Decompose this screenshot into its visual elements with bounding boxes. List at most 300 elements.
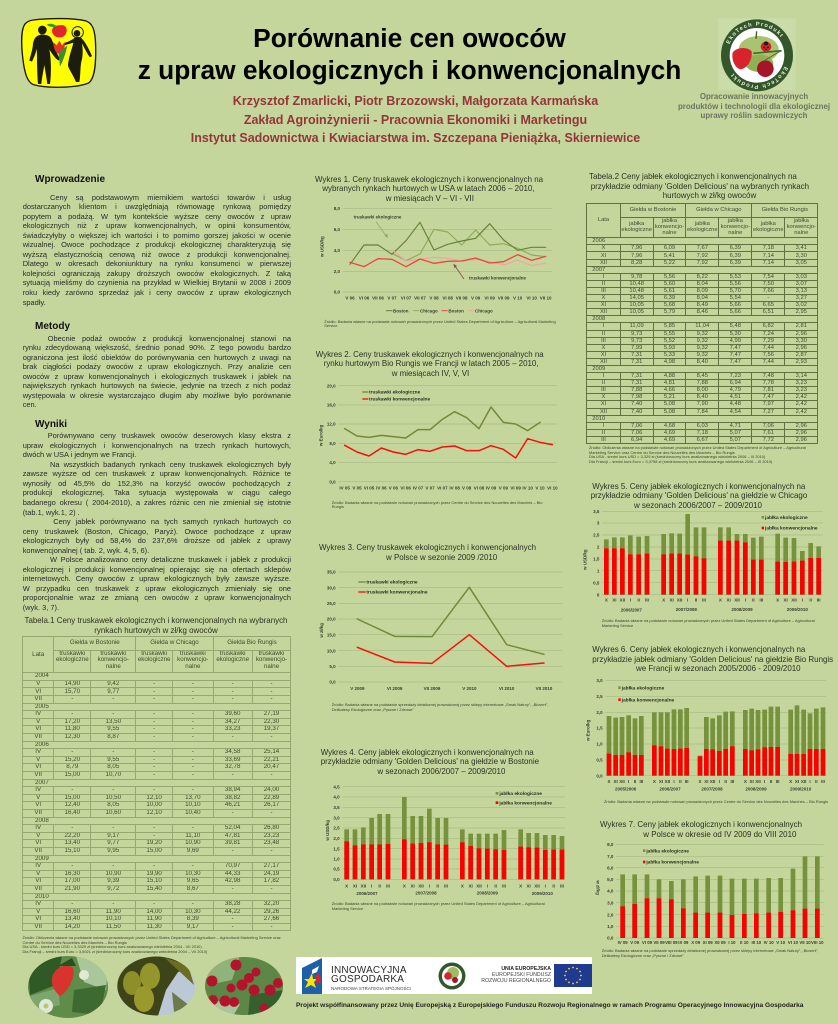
table 2: apple prices: 2,96 <box>796 430 807 436</box>
table 2: apple prices: 4,69 <box>664 437 675 443</box>
table 2: apple prices: 10,48 <box>629 281 644 287</box>
chart: Wykres 5 stacked bars: 2006/2007 <box>621 608 643 613</box>
heading: Wykres 4: przykładzie odmiany 'Golden Delicious' na giełdzie w Bostonie <box>321 757 539 766</box>
table 2: apple prices: 7,14 <box>763 260 774 266</box>
chart: Wykres 6 stacked bars: 2008/2009 <box>746 786 767 791</box>
chart: Wykres 4 stacked bars: 2,5 <box>333 825 340 830</box>
table 2: apple prices: II <box>602 331 605 337</box>
chart: Wykres 2 line chart: V 10 <box>535 485 545 490</box>
table 2: apple prices: 5,41 <box>664 253 675 259</box>
source note: Wykres 4: Źródło: Badania własne na podstawie notowań prowadzonych przez United States Department of Agriculture – Agricultural <box>332 901 545 906</box>
table 2: apple prices: 2,81 <box>796 323 807 329</box>
text block: Wprowadzenie: świadczyłyby o większej ich wartości i to pomimo gorszej jakości w ocenie <box>23 231 291 240</box>
table 2: apple prices: 6,39 <box>730 245 741 251</box>
table 2: apple prices: 7,96 <box>631 253 642 259</box>
chart: Wykres 4 stacked bars: 1,5 <box>333 846 340 851</box>
table 2: apple prices: 6,39 <box>664 295 675 301</box>
chart: Wykres 7 stacked bars: VI 09 <box>642 940 652 945</box>
chart: Wykres 1 line chart: Chicago <box>475 308 493 313</box>
chart: Wykres 6 stacked bars: XII <box>665 779 670 784</box>
authors and institute: Zakład Agroinżynierii - Pracownia Ekonomiki i Marketingu <box>244 112 587 126</box>
chart: Wykres 7 stacked bars: I 10 <box>728 940 736 945</box>
table 2: apple prices: 2,42 <box>796 394 807 400</box>
table 2: apple prices: 7,31 <box>631 359 642 365</box>
table 1: strawberry prices: ekologiczne <box>138 656 170 663</box>
chart: Wykres 6 stacked bars: XI <box>659 779 663 784</box>
table 2: apple prices: 7,66 <box>763 288 774 294</box>
table 1: strawberry prices: Giełda w Bostonie <box>70 639 120 646</box>
heading: Wykres 5: w sezonach 2006/2007 – 2009/2010 <box>634 501 762 510</box>
chart: Wykres 2 line chart <box>318 383 558 490</box>
chart: Wykres 6 stacked bars: 2,5 <box>597 694 603 699</box>
text block: Wyniki: ceny truskawek (Boston, Chicago, Paryż). Owoce pochodzące z upraw <box>23 527 291 536</box>
chart: Wykres 5 stacked bars: jabłka ekologiczne <box>764 515 808 521</box>
chart: Wykres 2 line chart: VI 06 <box>400 485 411 490</box>
chart: Wykres 4 stacked bars: II <box>552 883 555 888</box>
table 2: apple prices: 7,48 <box>763 373 774 379</box>
table 2: apple prices: 7,27 <box>763 409 774 415</box>
chart: Wykres 3 line chart: 25,0 <box>327 601 336 606</box>
table 2: apple prices: 5,22 <box>664 260 675 266</box>
chart: Wykres 4 stacked bars: XII <box>476 883 482 888</box>
table 2: apple prices: 3,03 <box>796 274 807 280</box>
chart: Wykres 3 line chart: w zł/kg <box>319 623 324 639</box>
chart: Wykres 1 line chart: VII 09 <box>498 295 510 300</box>
table 2: apple prices: 8,40 <box>697 394 708 400</box>
chart: Wykres 7 stacked bars: V 10 <box>776 940 785 945</box>
table 1: strawberry prices: konwencjo- <box>177 656 208 663</box>
chart: Wykres 6 stacked bars: 2005/2006 <box>615 786 637 791</box>
chart: Wykres 5 stacked bars: II <box>752 598 755 603</box>
table 2: apple prices: 3,07 <box>796 281 807 287</box>
chart: Wykres 2 line chart: V 06 <box>389 485 398 490</box>
chart: Wykres 2 line chart: IV 10 <box>522 485 533 490</box>
text block: Metody: cen. <box>23 400 37 409</box>
chart: Wykres 2 line chart: 16,0 <box>327 402 336 407</box>
chart: Wykres 6 stacked bars: III <box>685 779 689 784</box>
table 2: apple prices: 3,14 <box>796 373 807 379</box>
chart: Wykres 6 stacked bars: X <box>789 779 792 784</box>
table 2: apple prices: 7,47 <box>730 345 741 351</box>
table 2: apple prices: 7,31 <box>631 373 642 379</box>
table 2: apple prices: 3,23 <box>796 387 807 393</box>
table 1: strawberry prices: Giełda w Chicago <box>150 639 199 646</box>
chart: Wykres 7 stacked bars: 7,0 <box>607 854 613 859</box>
chart: Wykres 4 stacked bars: III <box>502 883 506 888</box>
chart: Wykres 2 line chart: VI 09 <box>510 485 521 490</box>
chart: Wykres 7 stacked bars: jabłka konwencjonalne <box>645 859 699 865</box>
chart: Wykres 7 stacked bars: 3,0 <box>607 900 613 905</box>
table 2: apple prices: 7,47 <box>730 352 741 358</box>
chart: Wykres 7 stacked bars: 5,0 <box>607 877 613 882</box>
table 2: apple prices: 7,06 <box>763 423 774 429</box>
heading: Tabela 2 <box>589 172 809 200</box>
chart: Wykres 4 stacked bars: 4,5 <box>333 784 340 789</box>
table 2: apple prices: 8,49 <box>697 302 708 308</box>
text: Innowacyjna Gospodarka: GOSPODARKA <box>331 974 404 985</box>
chart: Wykres 6 stacked bars: XII <box>756 779 761 784</box>
source note: Wykres 1: Źródło: Badania własne na podstawie notowań prowadzonych przez United States Department of Agriculture – Agricultural Marketing <box>324 318 556 324</box>
logo: EkoTech Produkt: EkoTech Produkt <box>726 22 783 44</box>
text block: Wyniki: Ceny jabłek porównywano na tych samych rynkach hurtowych co <box>53 517 291 526</box>
chart: Wykres 1 line chart: VII 07 <box>414 295 426 300</box>
heading: Wykres 2: Wykres 2. Ceny truskawek ekologicznych i konwencjonalnych na <box>316 350 544 358</box>
table 2: apple prices: 4,66 <box>664 387 675 393</box>
chart: Wykres 4 stacked bars: X <box>345 883 348 888</box>
table 2: apple prices: 6,39 <box>730 253 741 259</box>
source note: Wykres 5 <box>602 618 815 628</box>
chart: Wykres 6 stacked bars: X <box>744 779 747 784</box>
table 2: apple prices: 4,68 <box>664 423 675 429</box>
chart: Wykres 4 stacked bars: 2006/2007 <box>356 891 378 896</box>
chart: Wykres 4 stacked bars: I <box>429 883 430 888</box>
table 2: apple prices: XI <box>601 352 606 358</box>
chart: Wykres 6 stacked bars: X <box>653 779 656 784</box>
text block: Wyniki: Porównywano ceny truskawek owoców deserowych klasy ekstra z <box>48 431 291 440</box>
chart: Wykres 1 line chart: V 06 <box>345 295 355 300</box>
chart: Wykres 7 stacked bars <box>595 842 824 945</box>
chart: Wykres 6 stacked bars: II <box>770 779 773 784</box>
chart: Wykres 5 stacked bars: 1,5 <box>593 557 600 562</box>
chart: Wykres 6 stacked bars: X <box>608 779 611 784</box>
table 2: apple prices: jabłka <box>695 221 710 227</box>
chart: Wykres 7 stacked bars: 0,0 <box>607 935 613 940</box>
table 2: apple prices: X <box>602 295 605 301</box>
table 2: apple prices: jabłka <box>662 218 677 224</box>
chart: Wykres 1 line chart: VI 06 <box>359 295 370 300</box>
table 2: apple prices: konwencjo- <box>655 224 684 230</box>
chart: Wykres 5 stacked bars: XII <box>620 598 625 603</box>
table 2: apple prices: 7,18 <box>697 430 708 436</box>
chart: Wykres 5 stacked bars: III <box>645 598 649 603</box>
source note: table 2: Dla Francji – średni kurs Euro = 3,3798 zł (średnioroczny kurs analizowanego wieloletnia 2006 – III 2010) <box>589 459 772 464</box>
chart: Wykres 4 stacked bars: X <box>519 883 522 888</box>
table 2: apple prices: 4,79 <box>730 387 741 393</box>
table 2: apple prices: 8,09 <box>697 288 708 294</box>
text block: Wprowadzenie: spadły. <box>23 298 46 307</box>
table 2: apple prices: 7,18 <box>763 245 774 251</box>
chart: Wykres 7 stacked bars: XI 09 <box>702 940 713 945</box>
table 1: strawberry prices: nalne <box>185 663 200 670</box>
chart: Wykres 5 stacked bars: I <box>745 598 746 603</box>
table 2: apple prices: 2,87 <box>796 352 807 358</box>
text block: Wyniki: wynosiły od 45,5% do 152,3% na korzyść owoców pochodzących z <box>23 479 291 488</box>
heading: Wykres 1 <box>315 174 544 203</box>
table 2: apple prices: 5,85 <box>664 323 675 329</box>
chart: Wykres 7 stacked bars: III 10 <box>751 940 761 945</box>
table 2: apple prices: 2007 <box>592 267 605 273</box>
chart: Wykres 3 line chart: VI 2010 <box>499 686 515 691</box>
chart: Wykres 6 stacked bars: XI <box>750 779 754 784</box>
table 2: apple prices: 2,96 <box>796 423 807 429</box>
chart: Wykres 4 stacked bars: II <box>494 883 497 888</box>
chart: Wykres 5 stacked bars: X <box>776 598 779 603</box>
photo: cherries <box>205 957 283 1015</box>
text block: Wprowadzenie: wyższą elastycznością cenową niż owoce z produkcji konwencjonalnej. <box>23 250 291 259</box>
chart: Wykres 7 stacked bars: VI 10 <box>788 940 798 945</box>
table 2: apple prices: XII <box>600 260 607 266</box>
table 2: apple prices: 11,09 <box>630 323 644 329</box>
chart: Wykres 1 line chart: Chicago <box>420 308 438 313</box>
chart: Wykres 6 stacked bars: II <box>725 779 727 784</box>
chart: Wykres 6 stacked bars: I <box>674 779 675 784</box>
chart: Wykres 4 stacked bars: 3,5 <box>333 805 340 810</box>
heading: Wykres 1: wybranych rynkach hurtowych w USA w latach 2006 – 2010, <box>322 184 535 193</box>
source note: Wykres 7 <box>602 948 818 958</box>
table 2: apple prices: XI <box>601 302 606 308</box>
table 2: apple prices: 7,90 <box>697 401 708 407</box>
table 2: apple prices: 2,95 <box>796 309 807 315</box>
chart: Wykres 2 line chart: 20,0 <box>327 383 336 388</box>
chart: Wykres 1 line chart: 4,0 <box>334 248 340 253</box>
text block: Wprowadzenie: wizualnej. Owoce pochodzące z produkcji ekologicznej charakteryzują się <box>23 240 291 249</box>
table 2: apple prices: II <box>602 430 605 436</box>
table 2: apple prices: 7,98 <box>631 394 642 400</box>
table 2: apple prices: II <box>602 281 605 287</box>
chart: Wykres 1 line chart: V 08 <box>429 295 439 300</box>
table 2: apple prices: I <box>603 423 604 429</box>
text block: Metody: rynku zdecydowaną większość, średnio ponad 90%. Z tego powodu bardzo <box>23 343 291 352</box>
text block: Metody: owoców z upraw konwencjonalnych i ekologicznych truskawek i jabłek na <box>23 372 291 381</box>
photo: pears <box>117 956 196 1016</box>
chart: Wykres 1 line chart: 0,0 <box>334 290 340 295</box>
heading: Wykres 7: Wykres 7. Ceny jabłek ekologicznych i konwencjonalnych <box>600 820 802 829</box>
table 2: apple prices <box>586 203 818 444</box>
chart: Wykres 6 stacked bars: II <box>679 779 682 784</box>
chart: Wykres 1 line chart: VI 09 <box>484 295 495 300</box>
chart: Wykres 3 line chart: V 2009 <box>350 686 365 691</box>
chart: Wykres 4 stacked bars: II <box>378 883 381 888</box>
heading: Tabela 2: Tabela.2 Ceny jabłek ekologicznych i konwencjonalnych na <box>589 172 797 181</box>
icon: Innovative Economy flag <box>302 958 322 994</box>
table 2: apple prices: 5,56 <box>664 274 675 280</box>
chart: Wykres 4 stacked bars: 0,0 <box>333 877 340 882</box>
chart: Wykres 1 line chart: 8,0 <box>334 206 340 211</box>
table 2: apple prices: 5,79 <box>664 309 675 315</box>
chart: Wykres 6 stacked bars: 2006/2007 <box>660 786 681 791</box>
table 2: apple prices: 9,73 <box>631 331 642 337</box>
table 2: apple prices: XI <box>601 253 606 259</box>
text block: Wyniki: W Polsce analizowano ceny detaliczne truskawek i jabłek z produkcji <box>50 555 291 564</box>
table 2: apple prices: 6,67 <box>697 437 708 443</box>
chart: Wykres 5 stacked bars: X <box>662 598 665 603</box>
chart: Wykres 2 line chart: 12,0 <box>327 421 336 426</box>
table 2: apple prices: XII <box>600 359 607 365</box>
chart: Wykres 6 stacked bars: I <box>628 779 630 784</box>
chart: Wykres 7 stacked bars: VIII 09 <box>665 940 678 945</box>
table 2: apple prices: nalne <box>794 230 808 236</box>
chart: Wykres 7 stacked bars: II 10 <box>740 940 749 945</box>
chart: Wykres 4 stacked bars: XII <box>361 883 366 888</box>
chart: Wykres 1 line chart: VII 06 <box>372 295 384 300</box>
chart: Wykres 2 line chart: VI 10 <box>547 485 558 490</box>
source note: Wykres 3 <box>332 702 548 712</box>
table 2: apple prices: 3,27 <box>796 295 807 301</box>
table 2: apple prices: 5,55 <box>664 331 675 337</box>
table 2: apple prices: 5,08 <box>664 401 675 407</box>
chart: Wykres 3 line chart: 10,0 <box>327 649 336 654</box>
heading: Wykres 5 <box>591 482 807 510</box>
table 2: apple prices: 7,56 <box>763 352 774 358</box>
authors and institute: Instytut Sadownictwa i Kwiaciarstwa im. Szczepana Pieniążka, Skierniewice <box>191 131 640 145</box>
table 2: apple prices: III <box>601 437 606 443</box>
chart: Wykres 1 line chart: Boston <box>393 308 409 313</box>
chart: Wykres 2 line chart: 8,0 <box>329 441 336 446</box>
table 2: apple prices: 6,94 <box>730 380 741 386</box>
table 2: apple prices: 4,51 <box>730 394 741 400</box>
table 1: strawberry prices: nalne <box>264 663 279 670</box>
source note: Wykres 2: Rungis <box>332 504 344 509</box>
chart: Wykres 5 stacked bars: XI <box>613 598 617 603</box>
text block: Wyniki: ekologicznych były od 58,4% do 237,6% droższe od jabłek z uprawy <box>23 536 291 545</box>
table 1: strawberry prices: ekologiczne <box>56 656 89 663</box>
source note: table 2: Marketing Service oraz Centre du Service des Nouvelles des Marchés – Bio Rungis <box>589 450 735 455</box>
text block: Wyniki: proporcjonalnie wraz ze zmianą cen owoców z upraw konwencjonalnych <box>23 593 291 602</box>
chart: Wykres 2 line chart: VI 05 <box>364 485 375 490</box>
text block: Wprowadzenie <box>22 192 291 307</box>
chart: Wykres 5 stacked bars: w USD/kg <box>583 549 588 571</box>
table 2: apple prices: 4,98 <box>664 359 675 365</box>
source note: Wykres 6: Źródło: Badania własne na podstawie notowań prowadzonych przez Centre du Service des Nouvelles des Marchés – Bio Rungis <box>604 799 828 804</box>
chart: Wykres 2 line chart: truskawki ekologiczne <box>369 389 421 395</box>
chart: Wykres 6 stacked bars: I <box>764 779 766 784</box>
heading: Tabela 2: hurtowych w zł/kg owoców <box>663 191 756 200</box>
heading: Wykres 5: przykładzie odmiany 'Golden Delicious' na giełdzie w Chicago <box>591 491 807 500</box>
text block: Wyniki: (wyk. 3, 7). <box>23 603 59 612</box>
table 2: apple prices: 5,52 <box>664 338 675 344</box>
chart: Wykres 7 stacked bars: 4,0 <box>607 888 613 893</box>
table 2: apple prices: 10,05 <box>629 309 644 315</box>
chart: Wykres 5 stacked bars: I <box>802 598 803 603</box>
table 2: apple prices: 5,68 <box>664 302 675 308</box>
table 2: apple prices: 7,47 <box>730 359 741 365</box>
table 2: apple prices: 4,81 <box>664 380 675 386</box>
text block: Metody: występowała w okresie wystarczająco długim aby możliwe było porównanie <box>23 391 291 400</box>
chart: Wykres 4 stacked bars: 2009/2010 <box>532 891 553 896</box>
table 2: apple prices: 3,23 <box>796 380 807 386</box>
table 2: apple prices: 3,13 <box>796 288 807 294</box>
chart: Wykres 7 stacked bars: IV 09 <box>617 940 628 945</box>
table 2: apple prices: jabłka <box>761 221 776 227</box>
heading: Wykres 6 <box>592 645 833 673</box>
table 2: apple prices: 2,93 <box>796 359 807 365</box>
table 2: apple prices: 7,31 <box>631 380 642 386</box>
text block: Wyniki: upraw ekologicznych i konwencjonalnych na trzech rynkach hurtowych, <box>23 441 291 450</box>
chart: Wykres 5 stacked bars: 3,5 <box>593 509 600 514</box>
chart: Wykres 1 line chart: w USD/kg <box>320 236 325 258</box>
footer: funding statement: Projekt współfinansowany przez Unię Europejską z Europejskiego Funduszu Rozwoju Regionalnego w ramach Programu Operacyjnego Innowacyjna Gospodarka <box>296 1002 803 1009</box>
source note: Wykres 3: Delikatesy Ekologiczne oraz „Pyszne i Zdrowe” <box>332 707 414 712</box>
chart: Wykres 1 line chart: VII 10 <box>540 295 552 300</box>
chart: Wykres 6 stacked bars <box>586 678 826 791</box>
chart: Wykres 4 stacked bars: XI <box>353 883 357 888</box>
chart: Wykres 6 stacked bars: jabłka ekologiczne <box>621 685 665 691</box>
table 2: apple prices: 9,73 <box>631 338 642 344</box>
table 2: apple prices: XII <box>600 409 607 415</box>
table 1: strawberry prices: ekologiczne <box>216 656 249 663</box>
chart: Wykres 6 stacked bars: XII <box>801 779 807 784</box>
source note: table 2: Dla USA - średni kurs USD = 3,329 zł (średnioroczny kurs analizowanego wieloletnia 2006 – III 2010) <box>589 454 765 459</box>
chart: Wykres 5 stacked bars: III <box>817 598 821 603</box>
chart: Wykres 6 stacked bars: XII <box>710 779 716 784</box>
chart: Wykres 6 stacked bars: 2009/2010 <box>790 786 812 791</box>
chart: Wykres 6 stacked bars: III <box>640 779 644 784</box>
chart: Wykres 6 stacked bars: 0,0 <box>597 773 603 778</box>
heading: Wykres 1: Wykres 1. Ceny truskawek ekologicznych i konwencjonalnych na <box>315 174 543 184</box>
text block: Metody: Obecnie podaż owoców z produkcji konwencjonalnej stanowi na <box>48 334 291 342</box>
chart: Wykres 2 line chart: IV 09 <box>486 485 497 490</box>
table 2: apple prices: X <box>602 245 605 251</box>
chart: Wykres 6 stacked bars: jabłka konwencjonalne <box>621 697 675 703</box>
chart: Wykres 4 stacked bars: jabłka konwencjonalne <box>498 800 552 806</box>
chart: Wykres 7 stacked bars: jabłka ekologiczne <box>645 848 689 854</box>
source note: table 1: Dla USA - średni kurs USD = 3,3329 zł (średnioroczny kurs analizowanego wieloletnia 2004 - VII 2010) <box>22 944 202 949</box>
table 2: apple prices: 8,40 <box>697 359 708 365</box>
chart: Wykres 6 stacked bars: III <box>731 779 735 784</box>
chart: Wykres 6 stacked bars: XII <box>620 779 625 784</box>
table 2: apple prices: 8,28 <box>631 260 642 266</box>
chart: Wykres 2 line chart: truskawki konwencjonalne <box>369 396 430 402</box>
table 2: apple prices: 8,46 <box>697 309 708 315</box>
caption under logo: produktów i technologii dla ekologicznej <box>678 102 830 111</box>
chart: Wykres 7 stacked bars: IX 09 <box>678 940 689 945</box>
source note: Wykres 1: Service <box>324 323 337 328</box>
heading: Wykres 3: Wykres 3. Ceny truskawek ekologicznych i konwencjonalnych <box>319 543 536 552</box>
table 2: apple prices: 5,08 <box>664 409 675 415</box>
text: strategy subtitle: NARODOWA STRATEGIA SPÓJNOŚCI <box>331 986 411 991</box>
table 2: apple prices: 10,05 <box>629 302 644 308</box>
text block: Wprowadzenie: roku kiedy zarówno sprzedaż jak i ceny owoców z upraw ekologicznych <box>23 288 291 297</box>
heading: Wykres 6: we Francji w sezonach 2005/2006 - 2009/2010 <box>636 664 801 673</box>
table 2: apple prices: 3,05 <box>796 260 807 266</box>
table 2: apple prices: III <box>601 288 606 294</box>
heading: Wykres 2: w miesiącach IV, V, VI <box>392 369 469 378</box>
source note: Wykres 5: Marketing Service <box>602 623 633 628</box>
text block: Metody <box>22 334 291 409</box>
chart: Wykres 7 stacked bars: 2,0 <box>607 912 613 917</box>
table 2: apple prices: 4,88 <box>664 373 675 379</box>
chart: Wykres 7 stacked bars: w zł/kg <box>595 879 600 895</box>
title: Porównanie cen owoców <box>253 23 566 53</box>
chart: Wykres 3 line chart: truskawki konwencjonalne <box>366 590 428 596</box>
chart: Wykres 3 line chart: truskawki ekologiczne <box>366 580 418 586</box>
chart: Wykres 6 stacked bars: 0,5 <box>597 757 603 762</box>
table 2: apple prices: Lata <box>598 217 609 223</box>
table 2: apple prices: nalne <box>662 230 677 236</box>
table 2: apple prices: 7,06 <box>631 430 642 436</box>
table 2: apple prices: ekologiczne <box>687 227 718 233</box>
chart: Wykres 2 line chart: 0,0 <box>329 479 336 484</box>
table 2: apple prices: 7,40 <box>631 401 642 407</box>
table 2: apple prices: 9,32 <box>697 352 708 358</box>
text block: Wprowadzenie: ekologicznych niż z upraw konwencjonalnych, w opinii konsumentów, <box>23 221 291 230</box>
table 2: apple prices: 7,92 <box>697 253 708 259</box>
table 2: apple prices: 7,23 <box>730 373 741 379</box>
chart: Wykres 6 stacked bars: XI <box>795 779 799 784</box>
chart: Wykres 6 stacked bars: XI <box>614 779 618 784</box>
source note: Wykres 3: Źródło: Badania własne na podstawie sprzedaży detalicznej prowadzonej przez sklepy internetowe „Smak Natury”, „Biovert”, <box>332 702 548 707</box>
table 2: apple prices: 2,96 <box>796 331 807 337</box>
text block: Wprowadzenie: Dlatego w okresach dekoniunktury na rynku konsumenci w pierwszej <box>23 259 291 268</box>
text block: Wyniki: W przypadku cen truskawek z upraw ekologicznych zmieniały się one <box>23 584 291 593</box>
table 2: apple prices: jabłka <box>728 218 743 224</box>
table 2: apple prices: 3,30 <box>796 338 807 344</box>
table 2: apple prices: 2,96 <box>796 345 807 351</box>
chart: Wykres 7 stacked bars: 1,0 <box>607 924 613 929</box>
table 2: apple prices: 9,78 <box>631 274 642 280</box>
table 2: apple prices: 8,00 <box>697 387 708 393</box>
table 2: apple prices: jabłka <box>629 221 644 227</box>
